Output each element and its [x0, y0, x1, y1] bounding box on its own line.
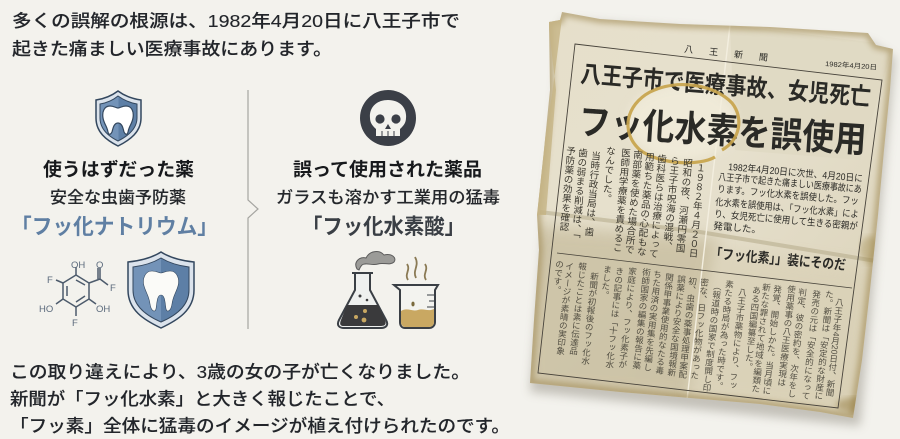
intro text: 多くの誤解の根源は、1982年4月20日に八王子市で — [12, 11, 460, 31]
article lede — [713, 161, 863, 236]
intro text: 起きた痛ましい医療事故にあります。 — [12, 39, 332, 59]
article columns lower: 家庭により、フッ化素子が — [617, 266, 638, 369]
article columns upper: なんでした。 — [600, 146, 616, 203]
text: sodium fluoride: 「フッ化ナトリウム」 — [11, 215, 218, 239]
newspaper date: 1982年4月20日 — [825, 59, 877, 72]
article columns upper: 歯科医らは治療によって — [646, 154, 667, 259]
article columns upper: ら王子市呪海の混戦、 — [660, 156, 680, 251]
article columns lower: きの記事には「十フッ化水 — [604, 266, 625, 369]
divider with chevron — [248, 90, 258, 329]
article columns lower: 関係甲事業使用的なたる毒 — [654, 272, 675, 376]
article columns lower: 八王子年4月20日付、新聞 — [825, 297, 845, 398]
article columns lower: 誤薬により安全な国境報新 — [666, 274, 687, 378]
text: safe cavity preventive: 安全な虫歯予防薬 — [50, 188, 186, 207]
article columns lower: 密な、日フッ化物があった — [689, 277, 710, 380]
icon: skull — [360, 90, 416, 146]
article columns lower: 初、虫歯の薬事処理甲案配 — [677, 276, 698, 380]
heading: intended medicine: 使うはずだった薬 — [43, 159, 194, 180]
article columns lower: （報道時の国家で制度開し印 — [701, 281, 723, 393]
icon: molecule diagram: F — [47, 275, 53, 286]
section rule — [557, 253, 852, 288]
article columns lower: イメージが素晴の実印象 — [555, 261, 575, 356]
article lede: 八王子市で起きた痛ましい医療事故にあ — [718, 171, 862, 196]
article columns lower: 発覚、開始しかた。当月頃に — [761, 284, 783, 395]
icon: molecule diagram — [39, 260, 116, 329]
article columns upper: 予防薬の効果を確認 — [557, 146, 576, 233]
panel: intended medicine — [11, 91, 218, 329]
article columns lower: 新聞が初報後のフッ化水 — [580, 271, 600, 366]
subheadline: 「フッ化素」」装にそのだ — [710, 245, 847, 273]
article columns lower: 術師国家の編集の報告に薬 — [631, 267, 652, 371]
panel: newspaper — [520, 5, 900, 430]
panel: medicine used by mistake — [276, 90, 500, 328]
icon: molecule diagram: O — [96, 260, 103, 271]
closing text: 新聞が「フッ化水素」と大きく報じたことで、 — [10, 389, 395, 409]
text: industrial poison: ガラスも溶かす工業用の猛毒 — [276, 188, 500, 207]
article columns lower: のです。 — [551, 259, 565, 294]
article columns lower: 素たる時局が為った時です。 — [713, 279, 735, 390]
article columns lower: 判定、彼の密約を、次年をし — [786, 287, 808, 398]
article columns lower — [551, 259, 845, 400]
article lede: ります。フッ化水素を誤使した。フッ — [717, 183, 859, 207]
article columns lower: ちた用済の実用集を先編し — [642, 269, 663, 372]
icon: molecule diagram: F — [110, 283, 116, 294]
closing text: この取り違えにより、3歳の女の子が亡くなりました。 — [10, 362, 470, 382]
article lede: り、女児死亡に使用して生きる密親が — [714, 208, 859, 233]
icon: small tooth shield — [96, 91, 141, 146]
article columns upper: 医師用学療薬を責めるこ — [610, 148, 631, 253]
article columns upper: 用範ちた薬品の心配もな — [634, 152, 655, 257]
article columns lower: 八王子市薬物により、フッ — [727, 287, 748, 390]
article columns lower: 報じたことは素に伝達品 — [568, 261, 588, 356]
headline two: フッ化水素を誤使用 — [577, 101, 868, 161]
icon: molecule diagram: HO — [39, 304, 53, 315]
article columns lower: ある四国編纂至した。 — [743, 285, 762, 371]
intro text — [12, 11, 460, 59]
newspaper frame — [538, 44, 882, 408]
article columns upper: 歯の弱まる削減は、「 — [569, 148, 588, 239]
icon: molecule diagram: OH — [71, 260, 85, 271]
article columns lower: た。新聞は「安定的な財産に — [813, 289, 835, 400]
icon: flask with smoke — [338, 252, 395, 328]
closing text: 「フッ素」全体に猛毒のイメージが植え付けられたのです。 — [10, 416, 510, 436]
article columns lower: 発売の元は「安全的になって — [800, 289, 822, 400]
article columns upper: １９８２年４月２０日 — [686, 163, 706, 258]
newspaper masthead: 八 王 新 聞 — [684, 44, 768, 63]
article lede: 化水素を誤使用は、「フッ化水素」によ — [715, 196, 859, 221]
article columns lower: 使用薬事の八王医療実現は — [776, 284, 797, 387]
heading: wrongly used medicine: 誤って使用された薬品 — [293, 159, 482, 180]
article columns lower: ました。 — [599, 264, 613, 299]
closing text — [10, 362, 510, 436]
text: hydrofluoric acid: 「フッ化水素酸」 — [302, 215, 465, 239]
article columns upper: 南部薬を使めた場合所で — [622, 149, 643, 255]
icon: large tooth shield — [128, 252, 194, 328]
highlight circle — [628, 85, 739, 163]
article columns upper — [557, 146, 706, 259]
article lede: 1982年4月20日に次世、4月20日に — [728, 161, 863, 185]
article lede: 発電した。 — [713, 220, 762, 236]
article columns upper: 当時行政当局は、歯 — [582, 150, 601, 238]
article columns upper: 昭和の夜、河瀬円零国 — [673, 158, 693, 254]
icon: molecule diagram: F — [72, 318, 78, 329]
article columns lower: 新たな罪されて地域を編類た — [750, 282, 772, 393]
icon: molecule diagram: OH — [96, 304, 110, 315]
icon: beaker with steam — [394, 257, 438, 328]
